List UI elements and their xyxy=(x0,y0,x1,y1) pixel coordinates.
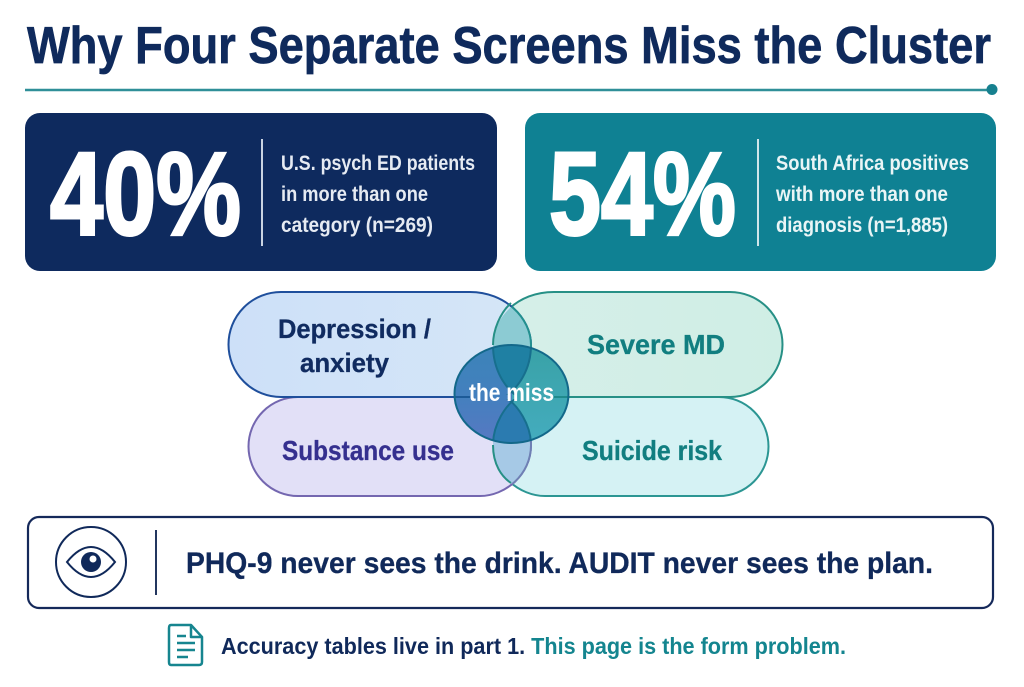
footer note xyxy=(169,625,846,665)
label: suicide risk: Suicide risk xyxy=(582,435,722,466)
label: depression / anxiety: anxiety xyxy=(300,348,389,378)
center circle: the miss xyxy=(454,344,570,444)
callout text: PHQ-9 never sees the drink. AUDIT never sees the plan. xyxy=(186,547,933,580)
overlap: lower lens xyxy=(493,440,532,484)
panel: 54% stat xyxy=(525,113,996,271)
stat number: 54%: 54% xyxy=(549,128,736,260)
pill: substance use xyxy=(248,397,531,496)
label: severe MD: Severe MD xyxy=(587,329,725,360)
icon: eye xyxy=(56,527,126,597)
stat description: South Africa: South Africa positives xyxy=(776,152,969,175)
pill: depression / anxiety xyxy=(229,292,531,397)
title rule xyxy=(25,84,998,95)
stat description: U.S. psych ED: U.S. psych ED patients xyxy=(281,152,475,175)
label: substance use: Substance use xyxy=(282,435,454,466)
stat description: U.S. psych ED: in more than one xyxy=(281,183,428,206)
diagram: overlapping screening categories xyxy=(229,292,783,496)
stat description: South Africa: diagnosis (n=1,885) xyxy=(776,214,948,237)
label: depression / anxiety: Depression / xyxy=(278,314,431,344)
overlap: upper lens xyxy=(493,306,532,348)
center circle: the miss: the miss xyxy=(469,379,554,407)
lens outer edges xyxy=(493,303,511,483)
footer text: Accuracy tables live in part 1. This page is the form problem. xyxy=(221,633,846,659)
icon: document xyxy=(169,625,202,665)
stat description: South Africa xyxy=(775,152,969,237)
label: depression / anxiety xyxy=(278,314,431,378)
pill: suicide risk xyxy=(493,397,768,496)
stat description: U.S. psych ED: category (n=269) xyxy=(281,214,433,237)
stat description: South Africa: with more than one xyxy=(775,183,948,206)
stat number: 40%: 40% xyxy=(50,128,241,260)
pill: severe MD xyxy=(493,292,782,397)
panel: 40% stat xyxy=(25,113,497,271)
callout box xyxy=(28,517,993,608)
stat description: U.S. psych ED xyxy=(281,152,475,237)
